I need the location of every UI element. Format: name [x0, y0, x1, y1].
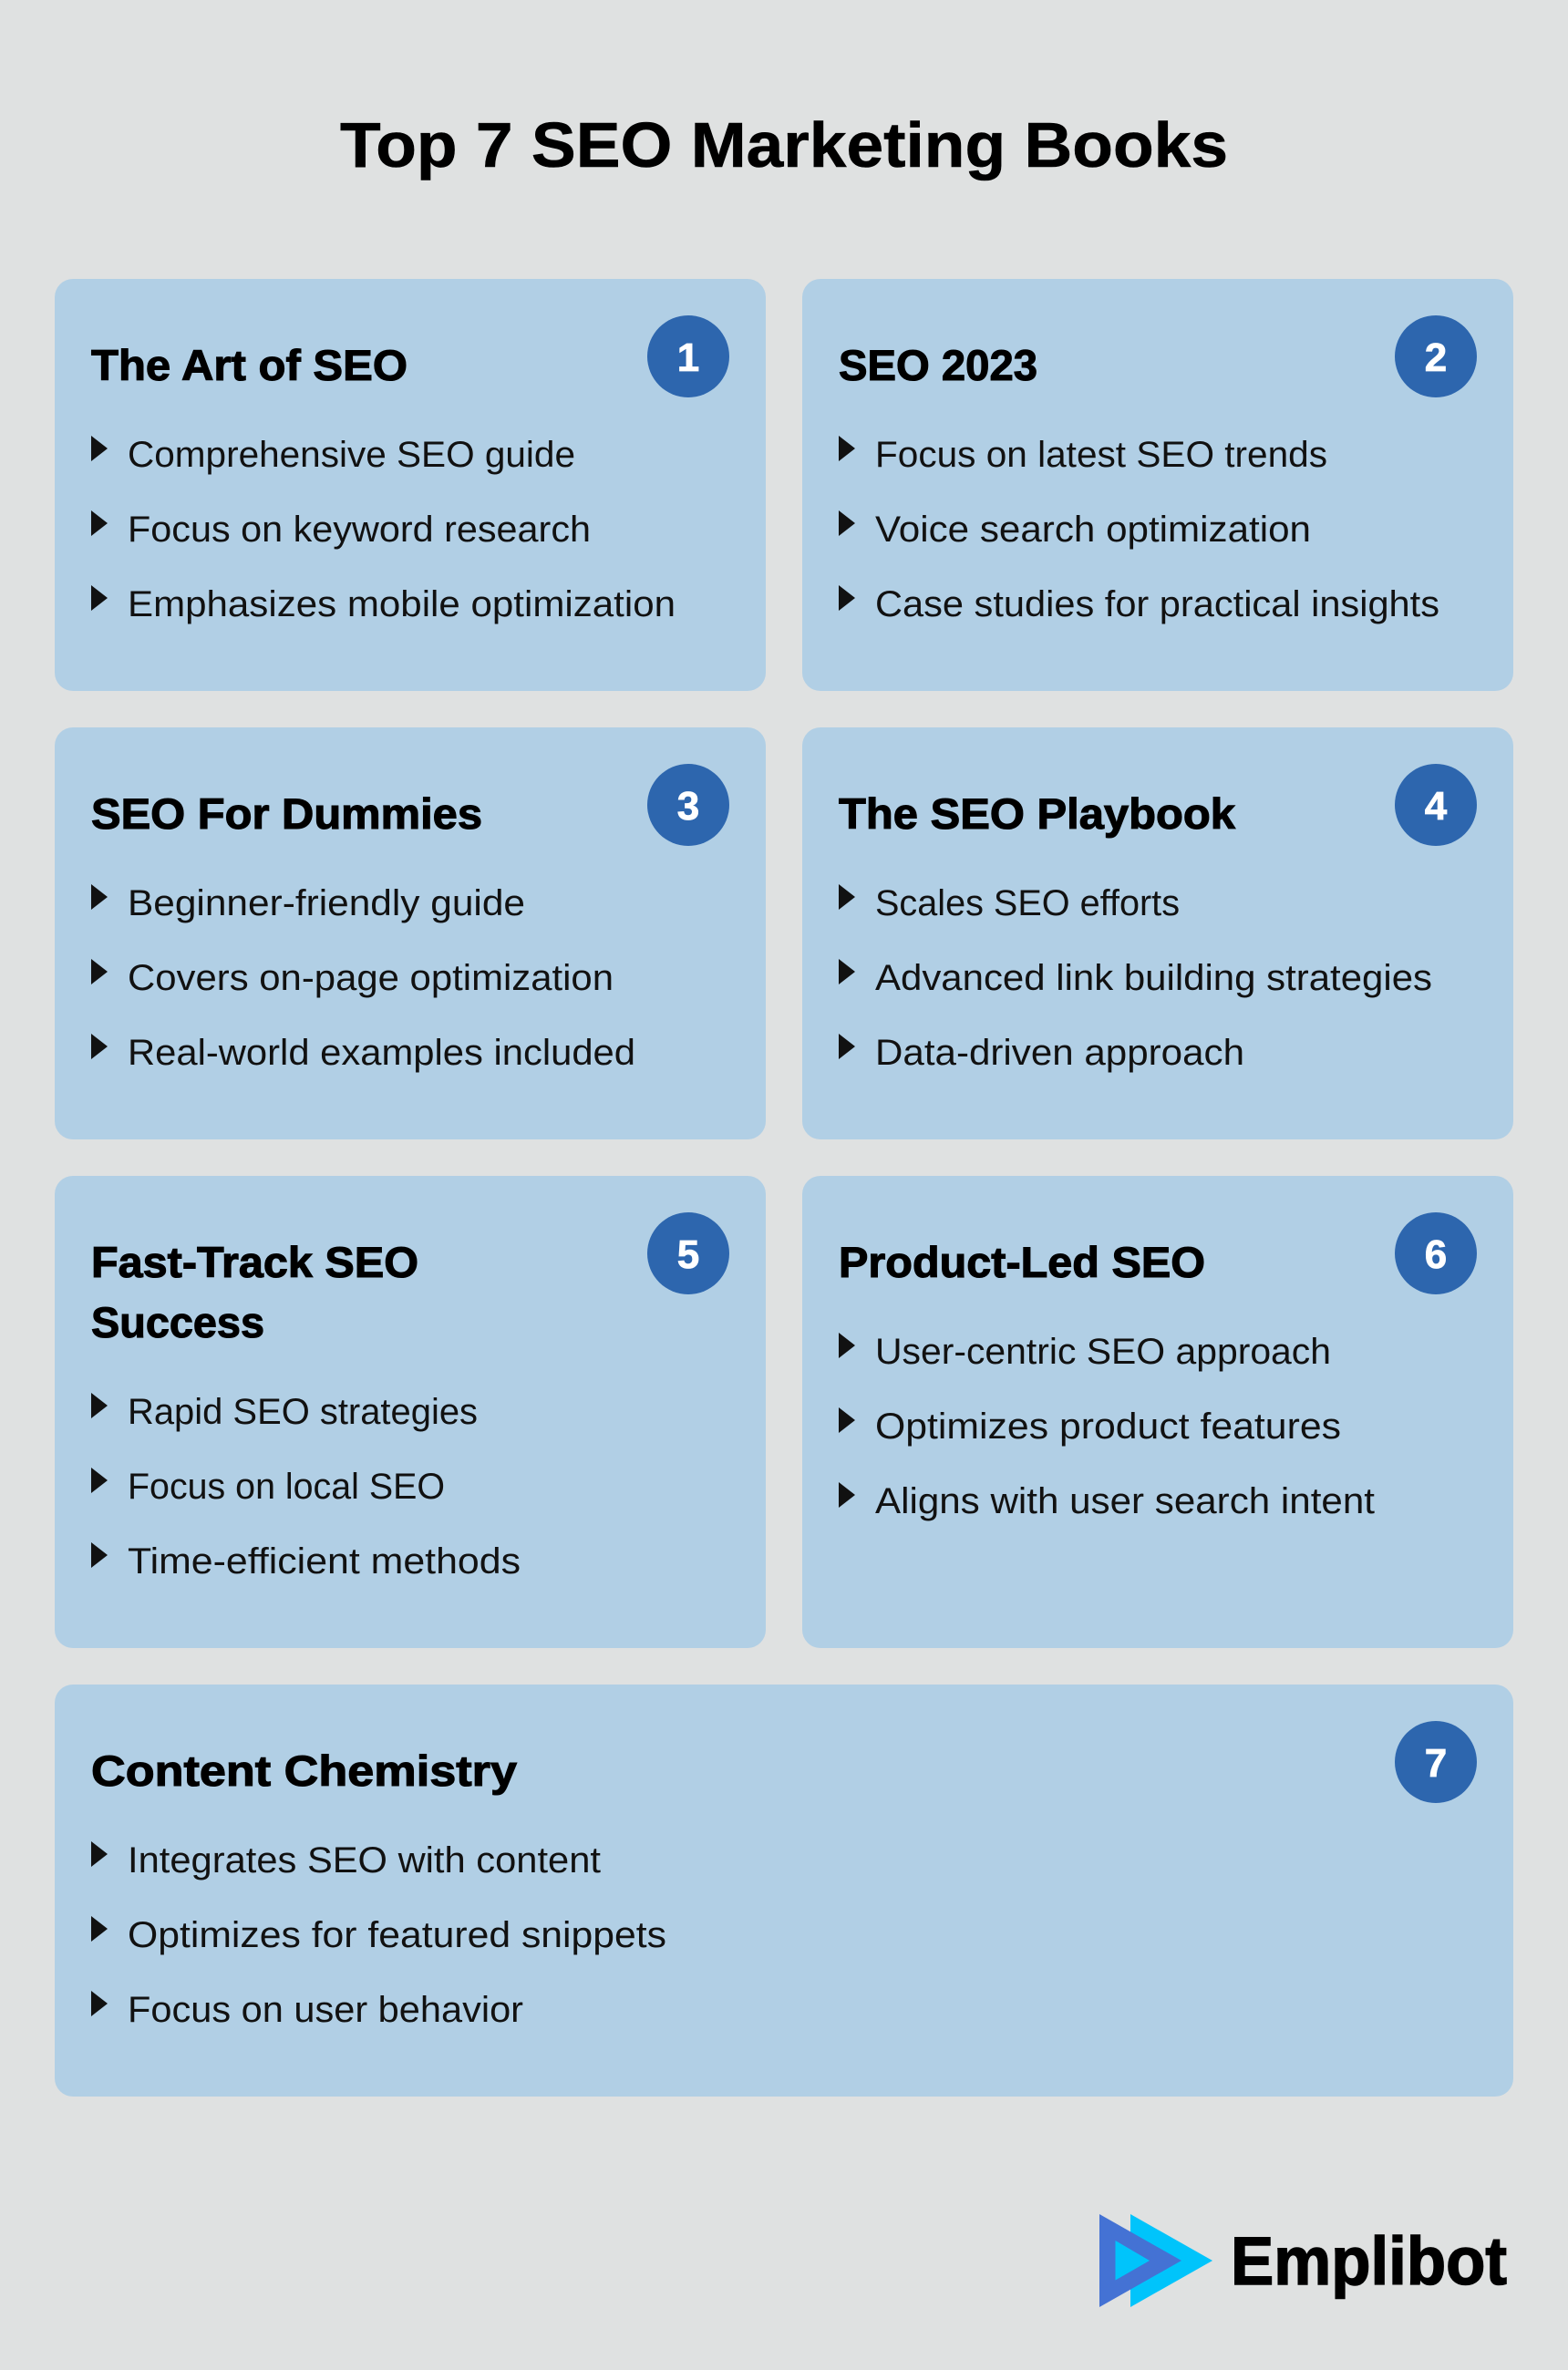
number badge 3 [647, 764, 729, 846]
bullet: Voice search optimization: Voice search optimization [875, 510, 1311, 550]
number badge 4 [1395, 764, 1477, 846]
heading: Fast-Track SEO Success: Fast-Track SEO [91, 1238, 418, 1286]
number badge 2 [1395, 315, 1477, 397]
bullet: Case studies for practical insights: Case studies for practical insights [875, 584, 1439, 624]
bullet: Focus on local SEO: Focus on local SEO [128, 1467, 445, 1507]
panel: SEO 2023 [802, 279, 1513, 691]
bullet: Time-efficient methods: Time-efficient methods [128, 1541, 521, 1582]
number badge 6: 6 [1425, 1232, 1447, 1277]
bullet: Comprehensive SEO guide: Comprehensive SEO guide [128, 435, 575, 475]
bullet: Data-driven approach: Data-driven approach [875, 1033, 1244, 1073]
bullet: Real-world examples included: Real-world examples included [128, 1033, 635, 1073]
heading: The SEO Playbook: The SEO Playbook [839, 789, 1236, 838]
panel: Content Chemistry [55, 1685, 1513, 2097]
heading: Product-Led SEO: Product-Led SEO [839, 1238, 1205, 1286]
bullet: Covers on-page optimization: Covers on-page optimization [128, 958, 614, 998]
number badge 1 [647, 315, 729, 397]
bullet: Optimizes product features: Optimizes product features [875, 1407, 1341, 1447]
heading: SEO 2023: SEO 2023 [839, 341, 1037, 389]
number badge 6 [1395, 1212, 1477, 1294]
number badge 7 [1395, 1721, 1477, 1803]
bullet: Focus on latest SEO trends: Focus on latest SEO trends [875, 435, 1327, 475]
number badge 7: 7 [1425, 1741, 1447, 1786]
bullet: Focus on keyword research: Focus on keyword research [128, 510, 591, 550]
wordmark: Emplibot [1231, 2223, 1507, 2299]
number badge 4: 4 [1425, 784, 1448, 829]
panel: The SEO Playbook [802, 727, 1513, 1139]
bullet: Advanced link building strategies: Advanced link building strategies [875, 958, 1432, 998]
number badge 1: 1 [677, 335, 699, 380]
heading: Fast-Track SEO Success [91, 1238, 418, 1346]
bullet: Aligns with user search intent: Aligns with user search intent [875, 1481, 1375, 1521]
bullet: Optimizes for featured snippets: Optimizes for featured snippets [128, 1915, 666, 1955]
number badge 3: 3 [677, 784, 699, 829]
title: Top 7 SEO Marketing Books [340, 109, 1228, 180]
logo: Emplibot [1099, 2214, 1507, 2307]
panel: Product-Led SEO [802, 1176, 1513, 1648]
bullet: Integrates SEO with content: Integrates SEO with content [128, 1840, 601, 1881]
heading: Fast-Track SEO Success: Success [91, 1298, 264, 1346]
bullet: Scales SEO efforts: Scales SEO efforts [875, 883, 1180, 923]
number badge 2: 2 [1425, 335, 1447, 380]
panel: The Art of SEO [55, 279, 766, 691]
number badge 5: 5 [677, 1232, 699, 1277]
heading: SEO For Dummies: SEO For Dummies [91, 789, 482, 838]
bullet: Beginner-friendly guide: Beginner-friendly guide [128, 883, 525, 923]
number badge 5 [647, 1212, 729, 1294]
bullet: User-centric SEO approach: User-centric SEO approach [875, 1332, 1331, 1372]
panel: SEO For Dummies [55, 727, 766, 1139]
panel: Fast-Track SEO Success [55, 1176, 766, 1648]
bullet: Rapid SEO strategies: Rapid SEO strategies [128, 1392, 478, 1432]
heading: Content Chemistry: Content Chemistry [91, 1747, 517, 1795]
icon: play triangles [1099, 2214, 1212, 2307]
bullet: Emphasizes mobile optimization: Emphasizes mobile optimization [128, 584, 676, 624]
heading: The Art of SEO: The Art of SEO [91, 341, 407, 389]
bullet: Focus on user behavior: Focus on user behavior [128, 1990, 523, 2030]
